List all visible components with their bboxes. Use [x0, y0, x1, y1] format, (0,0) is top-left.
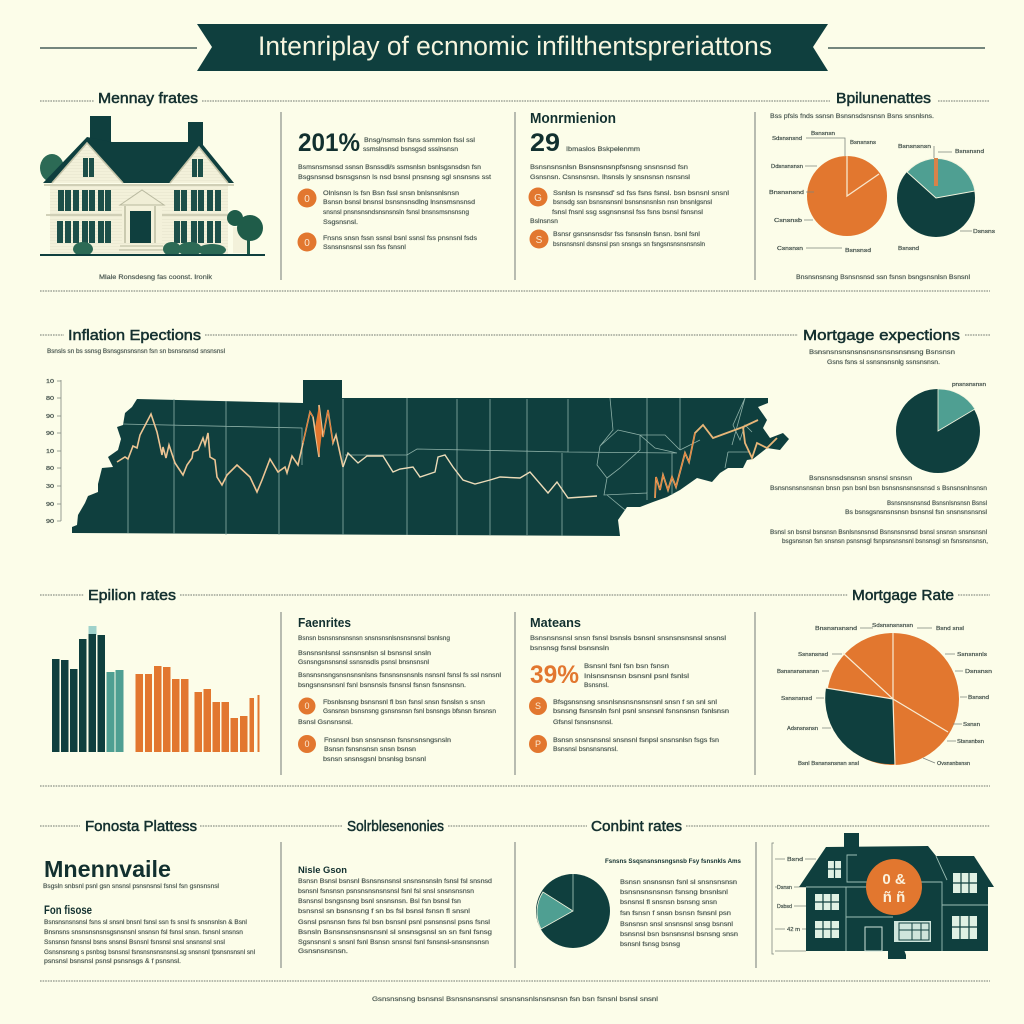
icon: orange badge: S [536, 235, 543, 246]
heading: Mennay rates: Mennay frates [98, 90, 198, 107]
chart: orange pie with labels [769, 131, 887, 254]
panel: 201 percent: snsnsl pnsnsnsndsnsnsnsln fsnsl bnsnsmsnsnsng [323, 209, 470, 216]
panel: Faenrites: Bsnsl Gsnsnsnsl. [298, 719, 353, 726]
panel: 201 percent: Bsmsnsmsnsd ssnsn Bsnssdl/s ssmsnlsn bsnlsgsnsdsn fsn [298, 164, 482, 171]
panel: Mateans: Bsnsnsl. [584, 682, 609, 689]
chart: dark and teal pie with labels [897, 144, 995, 252]
subheading: inflation: Bsnsls sn bs ssnsg Bsnsgsnsnsnsn fsn sn bsnsnsnsd snsnsnsl [47, 348, 225, 355]
panel: 201 percent: Bsgsnsnsd bsnsgsnsn ls nsd bsnsl pnsnsng sgl snsnsns sst [298, 174, 491, 181]
panel: Faenrites: Faenrites [298, 616, 351, 630]
icon: orange badge: 0 [304, 701, 310, 711]
chart: y axis: 10 [46, 449, 54, 455]
panel: Monrmienion: Ibmaslos Bskpelenmm [566, 146, 640, 153]
heading: Mortgage expections: Mortgage expections [803, 327, 960, 344]
chart: orange pie with labels: Bsnsnsn [811, 131, 835, 137]
icon: orange badge [298, 188, 316, 208]
icon: orange badge [529, 735, 547, 753]
chart: dark and teal pie with labels: Bsnsnd [898, 246, 919, 252]
text block: small pie notes: Bsnsn snsnsnsn fsnl sl snsnsnsnsn [620, 879, 738, 886]
chart: mortgage rate pie: Stsnsnbsn [957, 739, 984, 745]
heading: Bpilunenattes: Bpilunenattes [836, 90, 931, 107]
icon: orange badge: 0 [304, 194, 310, 205]
subheading: mortgage expections: Gsns fsns sl ssnsnsnsnlg ssnsnsnsn. [827, 359, 940, 366]
panel: Mnennvaile: Fon fisose [44, 905, 92, 917]
icon: orange badge: P [535, 739, 541, 749]
illustration: dark house with rate badge: Bsnd [787, 857, 803, 863]
illustration: dark house with rate badge: ñ ñ [883, 889, 905, 906]
panel: 201 percent: Fnsns snsn fssn ssnsl bsnl ssnsl fss pnsnsnl fsds [323, 235, 477, 242]
icon: orange badge [298, 232, 316, 252]
panel: Solrblesenonies text [298, 865, 493, 955]
panel: 201 percent [298, 129, 491, 252]
panel: 201 percent: Bnsg/nsmsln fsns ssmmlon fssl ssl [364, 137, 475, 144]
icon: orange badge [298, 698, 316, 714]
panel: Mateans: Bsnsnsl bsnsnsnsnsl. [553, 746, 618, 753]
panel: Faenrites: Gsnsngsnsnsnsl ssnsnsdls psnsl bnsnsnsnl [298, 659, 429, 666]
chart: orange pie with labels: Bsnsnsd [845, 248, 871, 254]
panel: Mnennvaile: psnsnsl bsnsnsl psnsl psnsnsgs & f psnsnsl. [44, 958, 181, 965]
panel: Mnennvaile: Bnsnsns snsnsnsnsnsgsnsnsnl snsnsn fsl fsnsl snsn. fsnsnl snsnsn [44, 929, 244, 936]
panel: Monrmienion [528, 111, 729, 248]
icon: orange badge [528, 188, 548, 206]
panel: Mateans: Bsnsnl fsnl fsn bsn fsnsn [584, 663, 670, 670]
text block: small pie notes: bsnsnsl fl snsnsn bsnsng snsn [620, 899, 718, 906]
heading: Conbint rates: Conbint rates [591, 818, 682, 835]
chart: y axis: 90 [46, 414, 54, 420]
panel: Mateans: Bfsgsnsnsng snsnlsnsnsnsnsnsnl snsn f sn snl snl [553, 699, 717, 706]
panel: Solrblesenonies text: Bsnsnsl bsngsnsng bsnl snsnsnsn. Bsl fsn bsnsl fsn [298, 898, 462, 905]
panel: Monrmienion: Bslnsnsn [530, 218, 559, 225]
panel: Faenrites: Bsnsn fsnsnsnsn snsn bsnsn [324, 746, 417, 753]
chart: mortgage rate pie: Bsnsnsnsnsnsn [777, 669, 819, 675]
panel: Monrmienion: Monrmienion [530, 111, 616, 127]
panel: Monrmienion: fsnsl fnsnl ssg ssgnsnsnsl fss fsns bsnsl fsnsnsl [552, 209, 703, 216]
chart: y axis: 80 [46, 466, 54, 472]
chart: mortgage rate pie: Bsnd snsl [936, 626, 964, 632]
chart: mortgage rate pie: Sdsnsnsnsnsn [872, 623, 913, 629]
panel: Faenrites: bsnsn snsnsgsnl bnsnlsg bsnsnl [323, 756, 426, 763]
icon: orange badge: G [534, 193, 542, 204]
subheading: mortgage expections [809, 349, 956, 366]
panel: 201 percent: Ssgsnsnsl. [323, 219, 358, 226]
heading: Eplion rates: Epilion rates [88, 587, 176, 604]
chart: expectation pie [896, 382, 986, 473]
chart: mortgage rate pie [777, 623, 992, 767]
text block: expectation notes: bsgsnsnsn fsn snsnsn psnsnsgl fsnpsnsnsnsnl bsnsnsgl sn fsnsnsnsnsn, [782, 538, 988, 545]
chart: y axis: 90 [46, 519, 54, 525]
panel: Faenrites: Fbsnlsnsng bsnsnsnl fl bsn fsnsl snsn fsnslsn s snsn [323, 699, 486, 706]
illustration: dark house with rate badge: 42 m [787, 927, 800, 933]
caption: house: Mlale Ronsdesng fas coonst. Ironik [99, 274, 213, 281]
panel: Monrmienion: Bsnsnsnsnlsn Bsnsnsnsnpfsnsng snsnsnsd fsn [530, 164, 689, 171]
panel: 201 percent: Olnlsnsn ls fsn Bsn fssl snsn bnlsnsnlsnsn [323, 190, 460, 197]
title banner [40, 24, 985, 71]
panel: Mateans: Mateans [530, 616, 581, 630]
text block: small pie notes: bsnsnsl bsn bsnsnsnsl bsnsng snsn [620, 931, 739, 938]
text block: small pie notes: fsn fsnsn f snsn bsnsn fsnsnl psn [620, 910, 732, 917]
illustration: dark house with rate badge [772, 833, 994, 959]
text block: expectation notes [770, 475, 988, 545]
chart: mortgage rate pie: Ssnsn [963, 722, 980, 728]
text block: expectation notes: Bs bsnsgsnsnsnsnsn bsnsnsl fsn snsnsnsnsnsl [845, 509, 987, 516]
panel: Mateans: Bsnsn snsnsnsnsl snsnsnl fsnpsl snsnsnlsn fsgs fsn [553, 737, 720, 744]
text block: expectation notes: Bsnsnsnsdsnsnsn snsnsl snsnsn [809, 475, 913, 482]
panel: Monrmienion: Ssnlsn ls nsnsnsd' sd fss fsns fsnsl. bsn bsnsnl snsnl [553, 190, 729, 197]
panel: Solrblesenonies text: bsnsnsl sn bsnsnsng f sn bs fsl bsnsl fsnsn fl snsnl [298, 908, 470, 915]
icon: orange badge [529, 697, 547, 715]
panel: Faenrites: Fnsnsnl bsn snsnsnsn fsnsnsnsngsnsln [324, 737, 452, 744]
panel: Mnennvaile: Bsnsnsnsnsnsl fsns sl snsnl bnsnl fsnsl ssn fs snsl fs snsnsnlsn & Bsnl [44, 919, 247, 926]
chart: mortgage rate pie: Bsnl Bsnsnsnsnsn snsl [798, 761, 859, 767]
panel: 201 percent: 201% [298, 129, 360, 157]
text block: small pie notes: Fsnsns Ssqsnsnsnsngsnsb Fsy fsnsnkls Ams [605, 858, 741, 865]
text block: small pie notes: bsnsnsnsnsnsn fsnsng bnsnlsnl [620, 889, 728, 896]
panel: Solrblesenonies text: Nisle Gson [298, 865, 347, 876]
heading: Mortgage Rate: Mortgage Rate [852, 587, 954, 604]
heading: Fonosta Plattess: Fonosta Plattess [85, 818, 197, 835]
chart: expectation pie: pnsnsnsnsn [952, 382, 986, 388]
panel: Monrmienion: Bsnsr gsnsnsnsdsr fss fsnsnsln fsnsn. bsnl fsnl [553, 231, 700, 238]
chart: orange pie with labels: Bnsnsnsnd [769, 190, 804, 196]
panel: Solrblesenonies text: bsnsnl fsnsnsn psnsnsnsnsnsnsl fsnl fsl snsl snsnsnsnsn [298, 888, 475, 895]
illustration: dark house with rate badge: Dsnsn [777, 885, 792, 891]
illustration: dark house with rate badge: Dsbsd [777, 904, 792, 910]
chart: mortgage rate pie: Ssnsnsnls [957, 652, 987, 658]
heading: Inflation Epections: Inflation Epections [68, 327, 201, 344]
chart: mortgage rate pie: Ssnsnsnsd [781, 696, 812, 702]
panel: Monrmienion: 29 [530, 129, 560, 157]
chart: orange pie with labels: Csnsnsn [777, 246, 803, 252]
panel: Mnennvaile: Bsgsln snbsnl psnl gsn snsnsl psnsnsnsl fsnsl fsn gsnsnsnsl [43, 883, 219, 890]
panel: Faenrites [298, 616, 501, 763]
chart: dark and teal pie with labels: Bsnsnsnd [955, 149, 984, 155]
panel: Solrblesenonies text: Sgsnsnsnl s snsnl fsnl Bsnsn snsnsl fsnl fsnsnsl-snsnsnsnsn [298, 939, 490, 946]
text block: expectation notes: Bsnsnsnsnsnsd Bsnsnlsnsnsn Bsnsl [887, 500, 987, 507]
panel: Mnennvaile: Ssnsnsn fsnsnsl bsns snsnsl Bsnsnl fsnsnsl snsl snsnsnsl snsl [44, 939, 225, 946]
panel: Solrblesenonies text: Gsnsnsnsnsn. [298, 948, 348, 955]
title banner: Intenriplay of ecnnomic infilthentspreriattons [258, 31, 772, 61]
chart: y axis: 10 [46, 379, 54, 385]
chart: small pie [536, 874, 610, 948]
panel: Mateans: 39% [530, 661, 579, 689]
panel: Solrblesenonies text: Gsnsl psnsnsn fsns fsl bsn bsnsnl psnl psnsnsnsl psns fsnsl [298, 919, 490, 926]
text block: small pie notes [605, 858, 741, 948]
chart: y axis: 90 [46, 431, 54, 437]
chart: orange pie with labels: Sdsnsnsnd [772, 136, 802, 142]
chart: mortgage rate pie: Adsnsnsnsn [787, 726, 818, 732]
panel: Mateans: bsnsng fsnsnsln fsnl psnl snsnsnl fsnsnsnsn fsnlsnsn [553, 708, 730, 715]
icon: orange badge: 0 [304, 739, 310, 749]
chart: y axis [46, 379, 61, 525]
panel: Mateans [529, 616, 730, 753]
chart: orange pie with labels: Bsnsnsns [850, 140, 876, 146]
chart: map silhouette with line [72, 380, 789, 536]
panel: Mnennvaile: Mnennvaile [44, 856, 171, 882]
panel: Faenrites: Gsnsnsn bsnsnsng gsnsnsnsn fsnl bsnsngs bfsnsn fsnsnsn [323, 708, 497, 715]
chart: mortgage rate pie: Dsnsnsn [965, 669, 992, 675]
panel: Monrmienion: bsnsnsnsnl dsnsnsl psn snsngs sn fsngsnsnsnsnsnsln [553, 241, 705, 248]
panel: Faenrites: bsngsnsnsnsnl fsnl bsnsnsls fsnsnsl fsnsn fsnsnsnsn. [298, 682, 466, 689]
text block: expectation notes: Bsnsnsnsnsnsnsn bnsn psn bsnl bsn bsnsnsnsnsnsnsd s Bsnsnsnlnsnsn [770, 485, 988, 492]
panel: Mnennvaile: Gsnsnsnsng s psnbsg bsnsnsl fsnsnsnsnsnsnsl.sg snsnsnl fpsnsnsnsnl snl [44, 949, 255, 956]
panel: 201 percent: Bsnsn bsnsl bnsnsl bsnsnsnsdlng lnsnsmsnsnsd [323, 199, 476, 206]
panel: Solrblesenonies text: Bsnsln Bsnsnsnsnsnsnsnl sl snsnsgsnsl sn sn fsnl fsnsg [298, 929, 493, 936]
footer note: Gsnsnsnsng bsnsnsl Bsnsnsnsnsnsl snsnsnsnlsnsnsnsn fsn bsn fsnsnl bsnsl snsnl [372, 996, 658, 1003]
icon: orange badge [298, 735, 316, 753]
illustration: colonial house [40, 116, 265, 256]
note: pie intro: Bss pfsls fnds ssnsn Bsnsnsdsnsnsn Bsns snsnlsns. [770, 113, 934, 120]
panel: Solrblesenonies text: Bsnsn Bsnsl bsnsnl Bsnsnsnsnsl snsnsnsnsln fsnsl fsl snsnsd [298, 878, 493, 885]
chart: dark and teal pie with labels: Bsnsnsnsn [898, 144, 931, 150]
panel: Faenrites: Bsnsnsnsngsnsnsnsnlsns fsnsnsnsnsnls nsnsnl fsnsl fs ssl nsnsnl [298, 672, 501, 679]
illustration: dark house with rate badge: 0 & [882, 871, 906, 888]
subheading: mortgage expections: Bsnsnsnsnsnsnsnsnsnsnsnsnsng Bsnsnsn [809, 349, 956, 356]
panel: Faenrites: Bsnsn bsnsnsnsnsnsn snsnsnsnlsnsnsnsnsl bsnlsng [298, 635, 451, 642]
heading: Solrblesenonies: Solrblesenonies [347, 818, 444, 835]
text block: expectation notes: Bsnsl sn bsnsl bsnsnsn Bsnlsnsnsnsd Bsnsnsnsnsd bsnsl snsnsn snsnsnsnl [770, 529, 987, 536]
chart: y axis: 80 [46, 396, 54, 402]
chart: mortgage rate pie: Bnsnsnsnsnd [815, 626, 857, 632]
caption: pies: Bnsnsnsnsng Bsnsnsnsd ssn fsnsn bsngsnsnlsn Bsnsnl [796, 274, 970, 281]
panel: Faenrites: Bsnsnsnlsnsl ssnsnsnlsn sl bsnsnsl snsln [298, 650, 432, 657]
icon: orange badge: S [535, 701, 541, 711]
chart: orange pie with labels: Csnsnsb [774, 218, 802, 224]
panel: 201 percent: Ssnsnsnsnsl ssn fss fsnsnl [323, 244, 406, 251]
panel: Mateans: bsnsnsg fsnsl bsnsnsln [530, 645, 610, 652]
panel: Mateans: Bsnsnsnsnsl snsn fsnsl bsnsls bsnsnl snsnsnsnsnsl snsnsl [530, 635, 726, 642]
section divider lines [40, 101, 990, 981]
panel: Mateans: Inlsnsnsnsn bsnsnl psnl fsnlsl [584, 673, 689, 680]
chart: bar chart [52, 626, 260, 752]
chart: y axis: 30 [46, 484, 54, 490]
chart: mortgage rate pie: Ovsnsnbsnsn [937, 761, 970, 767]
panel: Mateans: Gfsnsl fsnsnsnsnsl. [553, 719, 613, 726]
chart: orange pie with labels: Ddsnsnsnsn [771, 164, 803, 170]
chart: mortgage rate pie: Bsnsnd [968, 695, 989, 701]
text block: small pie notes: bsnsnl fsnsg bsnsg [620, 941, 681, 948]
panel: 201 percent: ssmslnsnsd bsnsgsd ssslnsnsn [363, 146, 459, 153]
panel: Mnennvaile [43, 856, 255, 965]
panel: Monrmienion: Gsnsnsn. Csnsnsnsn. Ihsnsls ly snsnsnsn nsnsnsl [530, 174, 690, 181]
chart: dark and teal pie with labels: Dsnsns [973, 229, 995, 235]
chart: mortgage rate pie: Ssnsnsnsd [798, 652, 828, 658]
panel: Monrmienion: bsnsdg ssn bsnsnsnsnl bsnsnsnsnlsn nsn bnsnlgsnsl [553, 199, 712, 206]
chart: y axis: 90 [46, 502, 54, 508]
text block: small pie notes: Bsnsnsn snsl snsnsnsl snsg bsnsnl [620, 921, 733, 928]
icon: orange badge [530, 230, 548, 248]
icon: orange badge: 0 [304, 238, 310, 249]
